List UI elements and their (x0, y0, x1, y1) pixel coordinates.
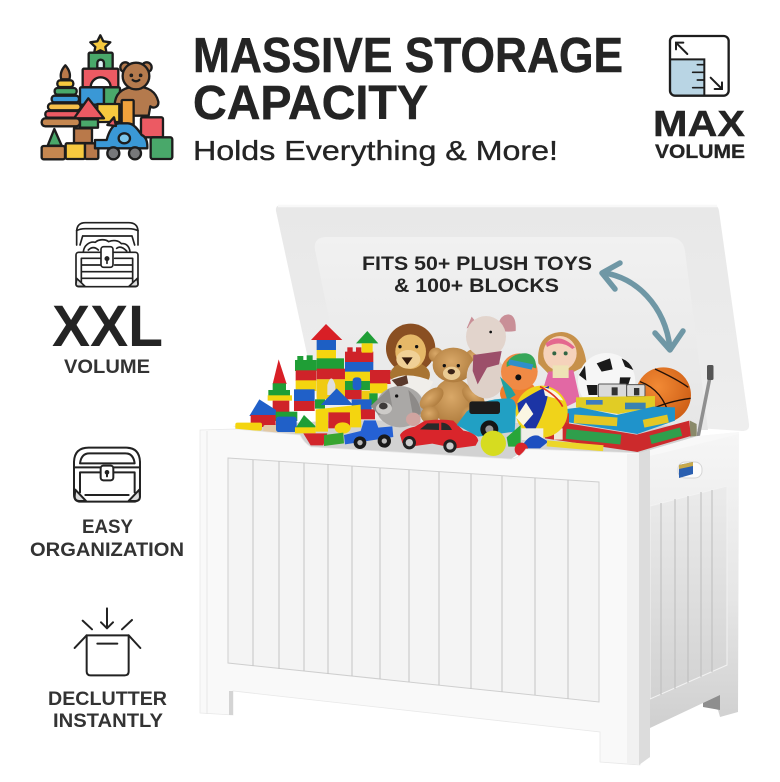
easy organization label: EASY (82, 516, 133, 538)
left leg shadow (229, 691, 233, 715)
max volume label: VOLUME (655, 141, 745, 163)
side handle cutout (678, 462, 702, 478)
xxl volume label: VOLUME (64, 356, 150, 378)
open lid (276, 205, 749, 431)
toys: plush animals (371, 317, 504, 427)
toy chest interior (233, 420, 697, 459)
callout: capacity text: FITS 50+ PLUSH TOYS (362, 253, 592, 275)
declutter instantly label (48, 688, 167, 732)
doll (538, 332, 587, 407)
volleyball (516, 386, 568, 438)
xxl volume label: XXL (52, 294, 163, 359)
lid support strut (698, 365, 714, 437)
blue truck (344, 420, 393, 449)
callout: capacity text (362, 253, 592, 297)
rabbit head and bow (466, 314, 516, 398)
front frame (200, 429, 640, 765)
front beadboard panel (228, 458, 599, 702)
rolls on games (598, 384, 645, 397)
soccer ball (578, 353, 635, 410)
toys: doll, balls, teal car and board games (457, 314, 697, 456)
icon: closed chest (74, 448, 140, 502)
easy organization label: ORGANIZATION (30, 539, 184, 561)
yellow game box (576, 396, 655, 414)
rabbit (467, 317, 504, 398)
max volume label: MAX (653, 103, 745, 144)
icon: toy pile (42, 35, 172, 159)
clown toy (500, 353, 538, 407)
icon: max volume gauge (670, 36, 729, 96)
blue game box (558, 407, 675, 434)
declutter instantly label: DECLUTTER (48, 688, 167, 710)
teal car (457, 398, 516, 438)
easy organization label (30, 516, 184, 561)
title: CAPACITY (193, 77, 428, 130)
toy cars: blue truck and red car (344, 420, 478, 453)
red car (400, 420, 478, 453)
title: MASSIVE STORAGE (193, 29, 623, 83)
callout: capacity text: & 100+ BLOCKS (394, 275, 559, 297)
small toys near tennis ball (481, 425, 604, 456)
lion (386, 324, 435, 388)
red game box (545, 421, 697, 452)
icon: open treasure chest (76, 223, 138, 287)
declutter instantly label: INSTANTLY (53, 710, 163, 732)
side face (628, 432, 739, 764)
title (193, 29, 623, 130)
arrow: curved double arrow (602, 263, 683, 350)
basketball (636, 367, 691, 423)
icon: box with down arrow (75, 608, 140, 675)
teddy bear (416, 348, 488, 425)
subtitle: Holds Everything & More! (193, 135, 558, 166)
toys: building blocks (235, 324, 391, 446)
max volume label (653, 103, 745, 163)
grey dog (371, 375, 433, 427)
front corner leg shading (627, 450, 650, 765)
storage chest body (200, 429, 739, 765)
